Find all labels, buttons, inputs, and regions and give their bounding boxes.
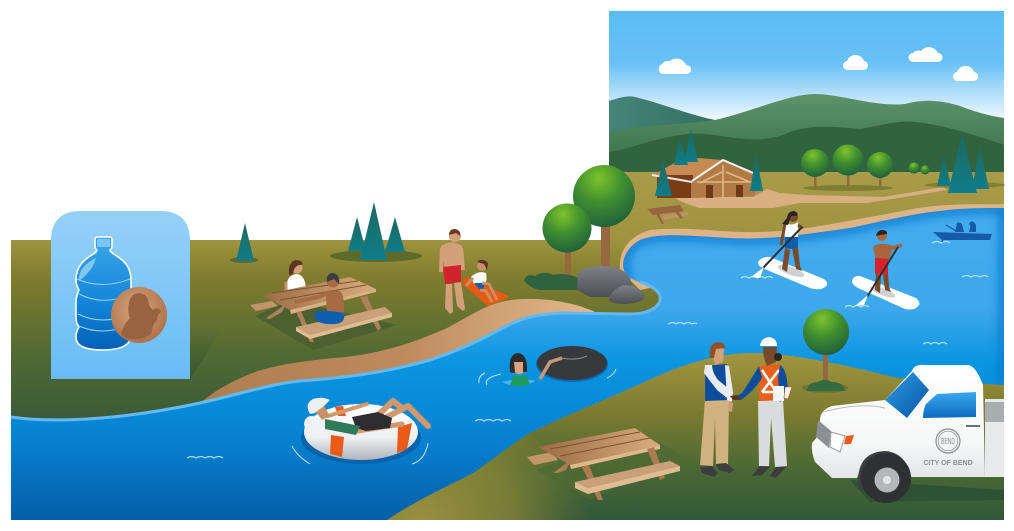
picnic table: foreground (527, 428, 682, 500)
small picnic table (647, 205, 689, 224)
paddleboarder: man (852, 230, 920, 310)
icon: penny (111, 287, 167, 343)
shrubs (524, 273, 578, 290)
cabin (652, 157, 758, 198)
icon: water bottle (76, 237, 131, 350)
lake ripples (187, 242, 988, 458)
paddleboarder: woman (751, 211, 827, 289)
back bench (250, 301, 278, 311)
city truck (812, 365, 1004, 503)
truck bed (985, 399, 1004, 477)
side window (923, 392, 976, 418)
picnic table with two people (250, 260, 397, 350)
shadow wedge beside card (190, 327, 224, 379)
lower bank land (387, 353, 1004, 520)
right pine cluster (925, 133, 1005, 193)
swimmer with black tube (479, 346, 616, 386)
pine tree: left solo (230, 223, 258, 263)
wheel (858, 451, 911, 503)
black inner tube (536, 346, 608, 382)
canoe silhouette (933, 221, 992, 242)
headlight and grille (816, 406, 885, 452)
white ring (304, 404, 418, 460)
sky panel (609, 11, 1004, 176)
sandy path (198, 299, 595, 405)
city of bend logo (936, 429, 960, 453)
woman in orange vest (730, 337, 792, 478)
meadow and left land (11, 172, 1004, 440)
icon: water bottle and penny card (51, 211, 190, 379)
woman on orange towel (461, 260, 510, 306)
tree row (801, 144, 930, 191)
rocks (577, 266, 645, 304)
sandy shore (620, 204, 1004, 290)
cabin pines (655, 129, 763, 196)
mountains (609, 94, 1004, 180)
man seated (295, 273, 344, 324)
city of bend logo: BEND (941, 437, 955, 446)
man on white tube (292, 398, 428, 464)
front bench (296, 307, 392, 335)
windshield (885, 372, 929, 418)
standing man in red shorts (441, 229, 465, 314)
tree: medium left (542, 204, 592, 276)
tree: large (573, 165, 635, 270)
pine cluster (330, 202, 422, 262)
truck door label: CITY OF BEND (923, 460, 973, 467)
table top (262, 277, 376, 310)
woman seated (286, 260, 306, 298)
man in blue vest (700, 342, 734, 477)
truck body (812, 365, 985, 478)
river and lake (11, 208, 1004, 520)
two people shaking hands (700, 337, 792, 478)
tree on lower hill (802, 309, 849, 393)
card background (51, 211, 190, 379)
dirt trail (673, 187, 947, 208)
clouds (659, 47, 978, 81)
